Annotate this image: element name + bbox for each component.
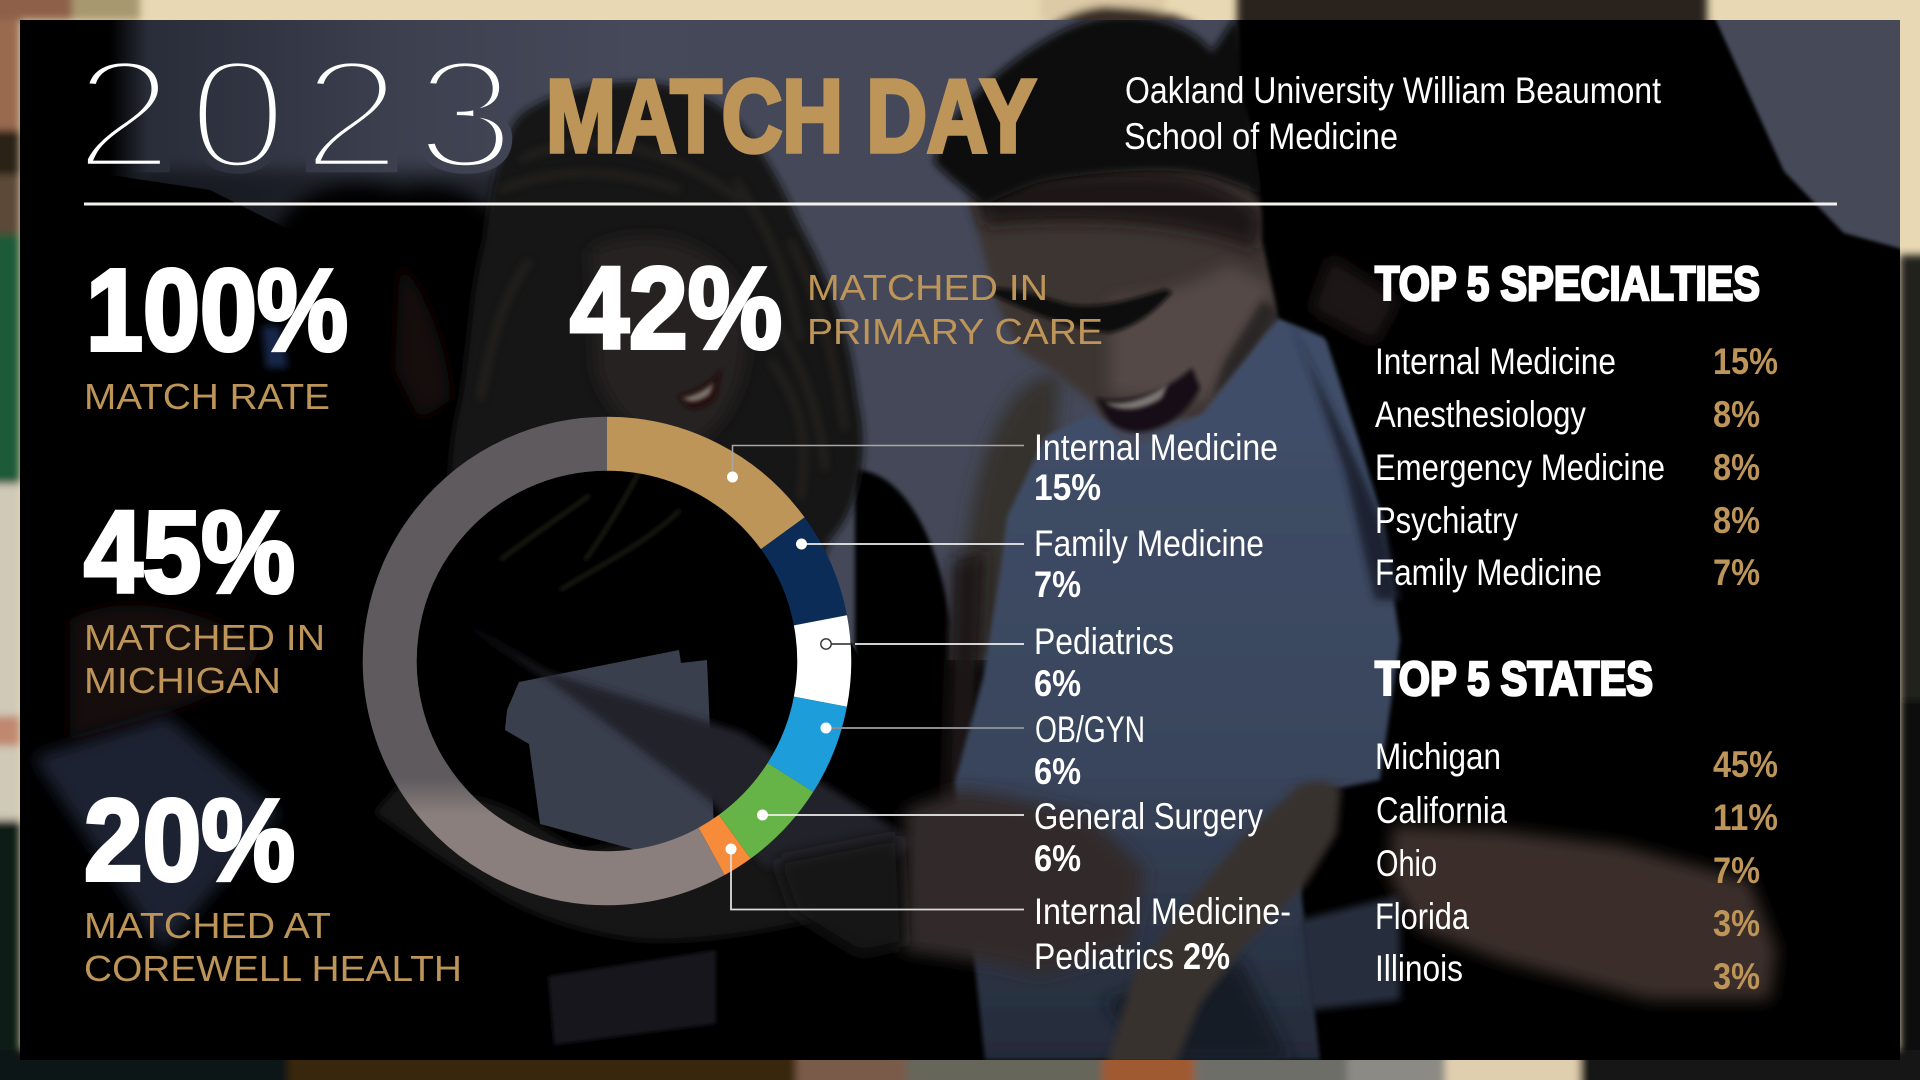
chart label: internal medicine-pediatrics: Pediatrics	[1034, 936, 1174, 977]
stat: primary care	[570, 243, 1103, 373]
list: states: 7%	[1713, 850, 1760, 891]
list: states: Michigan	[1375, 736, 1501, 777]
stat: primary care: 42%	[570, 243, 782, 373]
list: specialties: Internal Medicine	[1375, 341, 1616, 382]
stat: matched at corewell health	[84, 775, 462, 989]
list: states: 11%	[1713, 797, 1778, 838]
leader lines and dots	[726, 446, 1024, 910]
chart label: internal medicine-pediatrics	[1034, 891, 1291, 977]
list: states: 45%	[1713, 744, 1778, 785]
list: states: Florida	[1375, 896, 1469, 937]
panel: top 5 specialties	[1375, 258, 1778, 593]
chart label: family medicine	[1034, 523, 1264, 605]
list: specialties: Psychiatry	[1375, 500, 1518, 541]
list: states: Ohio	[1376, 843, 1437, 884]
list: states	[1375, 736, 1778, 997]
list: specialties: 7%	[1713, 552, 1760, 593]
list: states: Illinois	[1375, 948, 1463, 989]
list: specialties: 15%	[1713, 341, 1778, 382]
list: specialties: 8%	[1713, 500, 1760, 541]
donut chart	[390, 444, 824, 878]
list: specialties: 8%	[1713, 394, 1760, 435]
list: specialties: 8%	[1713, 447, 1760, 488]
school name	[1124, 70, 1662, 157]
chart label: ob/gyn: 6%	[1034, 751, 1081, 792]
chart label: ob/gyn	[1034, 709, 1145, 792]
list: specialties	[1375, 341, 1778, 593]
hands and forearms	[775, 781, 1777, 1065]
chart label: internal medicine-pediatrics: Internal Medicine-	[1034, 891, 1291, 932]
chart label: family medicine: Family Medicine	[1034, 523, 1264, 564]
envelope and diagonal paper	[374, 619, 918, 1045]
list: states: 3%	[1713, 956, 1760, 997]
title: match day: MATCH DAY	[546, 58, 1036, 174]
segment: remainder	[390, 444, 712, 878]
stat: matched at corewell health: MATCHED AT	[84, 905, 331, 946]
school name: Oakland University William Beaumont	[1125, 70, 1662, 111]
chart label: ob/gyn: OB/GYN	[1035, 709, 1145, 750]
chart label: internal medicine	[1034, 427, 1278, 508]
stat: matched at corewell health: COREWELL HEALTH	[84, 948, 462, 989]
segment: pediatrics 6%	[820, 620, 824, 702]
man shirt	[955, 317, 1400, 1060]
list: states: California	[1376, 790, 1507, 831]
stat: matched in michigan	[84, 487, 325, 701]
segment: general surgery 6%	[735, 777, 790, 837]
heading rule	[84, 202, 1837, 206]
stat: match rate	[84, 245, 348, 417]
title: 2023: 2023	[74, 27, 515, 201]
woman hair over shoulder right	[1235, 20, 1900, 604]
segment: family medicine 7%	[783, 533, 820, 620]
list: states: 3%	[1713, 903, 1760, 944]
chart label: pediatrics: 6%	[1034, 663, 1081, 704]
chart label: family medicine: 7%	[1034, 564, 1081, 605]
stat: matched in michigan: MICHIGAN	[84, 660, 281, 701]
stat: matched in michigan: MATCHED IN	[84, 617, 325, 658]
left side shapes	[33, 260, 450, 950]
stat: primary care: PRIMARY CARE	[807, 311, 1103, 352]
stat: match rate: MATCH RATE	[84, 376, 330, 417]
chart label: general surgery: 6%	[1034, 838, 1081, 879]
chart label: internal medicine-pediatrics: 2%	[1183, 936, 1230, 977]
chart label: internal medicine: 15%	[1034, 467, 1101, 508]
segment: internal medicine 15%	[607, 444, 783, 533]
segment: ob/gyn 6%	[790, 702, 820, 777]
chart label: general surgery	[1034, 796, 1263, 879]
stat: matched in michigan: 45%	[84, 487, 295, 617]
stat: matched at corewell health: 20%	[84, 775, 295, 905]
school name: School of Medicine	[1124, 116, 1398, 157]
segment: internal medicine-pediatrics 2%	[712, 837, 735, 851]
chart label: pediatrics	[1034, 621, 1174, 704]
stat: match rate: 100%	[86, 245, 348, 375]
stat: primary care: MATCHED IN	[807, 267, 1048, 308]
list: specialties: Emergency Medicine	[1375, 447, 1665, 488]
heading: top 5 states: TOP 5 STATES	[1375, 653, 1653, 706]
panel: top 5 states	[1375, 653, 1778, 997]
heading: top 5 specialties: TOP 5 SPECIALTIES	[1375, 258, 1760, 311]
list: specialties: Anesthesiology	[1375, 394, 1586, 435]
chart label: pediatrics: Pediatrics	[1034, 621, 1174, 662]
chart label: general surgery: General Surgery	[1034, 796, 1263, 837]
woman head and hair	[447, 78, 868, 592]
list: specialties: Family Medicine	[1375, 552, 1602, 593]
man head and hair	[934, 14, 1285, 432]
chart label: internal medicine: Internal Medicine	[1034, 427, 1278, 468]
